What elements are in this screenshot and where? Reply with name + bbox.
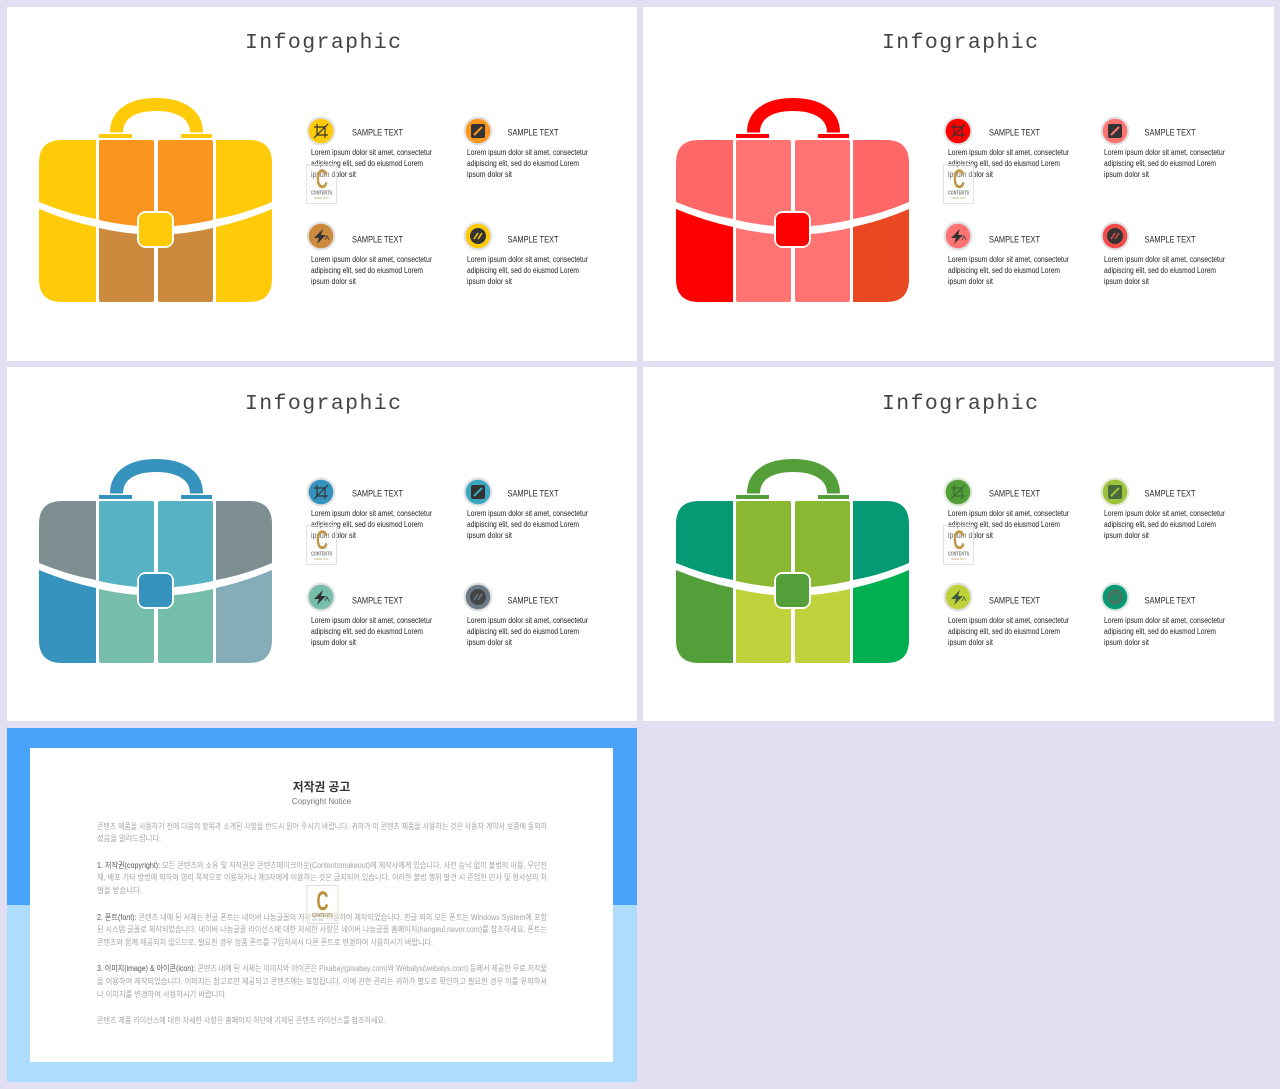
item 1: ipsum dolor sit (311, 170, 357, 179)
notice body text: 셨음을 알려드립니다. (97, 833, 161, 843)
watermark: CONTENTS (312, 913, 334, 919)
item 4: adipiscing elit, sed do eiusmod Lorem (467, 266, 579, 275)
item 3: SAMPLE TEXT (989, 234, 1040, 246)
item 3: ipsum dolor sit (311, 277, 357, 286)
item 4: SAMPLE TEXT (1144, 234, 1196, 246)
title: Infographic (245, 392, 401, 416)
item 1: ipsum dolor sit (948, 531, 994, 540)
watermark (306, 525, 336, 564)
item 2: ipsum dolor sit (467, 170, 513, 179)
item 1: adipiscing elit, sed do eiusmod Lorem (948, 520, 1060, 529)
notice body text: 재, 배포 기타 방법에 의하여 영리 목적으로 이용하거나 제3자에게 이용하는 것은 금지되어 있습니다. 이러한 불법 행위 발견 시 준엄한 민사 및 형사상의 처 (97, 872, 547, 882)
item 2: ipsum dolor sit (1104, 531, 1150, 540)
item 4: ipsum dolor sit (1104, 638, 1150, 647)
item 4: SAMPLE TEXT (1144, 596, 1196, 606)
panel: blue briefcase (7, 367, 637, 721)
item 1: adipiscing elit, sed do eiusmod Lorem (311, 520, 423, 529)
item 1: Lorem ipsum dolor sit amet, consectetur (311, 509, 432, 518)
item 3 (944, 582, 1069, 647)
item 2 (464, 478, 588, 540)
watermark: C (316, 886, 328, 916)
item 2: adipiscing elit, sed do eiusmod Lorem (1104, 159, 1216, 168)
item 3: SAMPLE TEXT (352, 234, 403, 246)
item 3: SAMPLE TEXT (989, 596, 1040, 606)
watermark: C (316, 525, 328, 555)
item 2: SAMPLE TEXT (508, 128, 559, 138)
item 3: adipiscing elit, sed do eiusmod Lorem (311, 627, 423, 636)
notice subheading: Copyright Notice (292, 797, 352, 806)
item 1 (944, 478, 1069, 540)
panel: red briefcase (643, 7, 1274, 361)
title: Infographic (882, 31, 1038, 55)
watermark: C (953, 164, 965, 194)
item 1: adipiscing elit, sed do eiusmod Lorem (311, 159, 423, 168)
item 2: Lorem ipsum dolor sit amet, consectetur (1104, 509, 1225, 518)
item 3 (944, 222, 1069, 286)
item 2 (1100, 478, 1225, 540)
notice body text: 된 시스템 글꼴로 제작되었습니다. 네이버 나눔글꼴 라이선스에 대한 자세한 사항은 네이버 나눔글꼴 홈페이지(hangeul.naver.com)를 참조하세요. 폰트는 (97, 924, 547, 934)
notice body text (97, 821, 548, 1025)
notice body text: 콘텐츠와 함께 제공되지 않으므로, 필요한 경우 정품 폰트를 구입하셔서 다른 폰트로 변경하여 사용하시기 바랍니다. (97, 937, 433, 947)
notice body text: 콘텐츠 제품 라이선스에 대한 자세한 사항은 홈페이지 하단에 기재된 콘텐츠 라이선스를 참조하세요. (97, 1015, 386, 1025)
watermark (306, 164, 336, 204)
item 4: ipsum dolor sit (467, 638, 513, 647)
item 4: Lorem ipsum dolor sit amet, consectetur (1104, 616, 1225, 625)
title: Infographic (882, 392, 1038, 416)
watermark: CONTENTS (948, 190, 970, 196)
item 3: adipiscing elit, sed do eiusmod Lorem (311, 266, 423, 275)
watermark (944, 164, 974, 204)
item 3 (306, 222, 432, 286)
watermark (944, 525, 974, 564)
item 1: Lorem ipsum dolor sit amet, consectetur (311, 148, 432, 157)
item 1 (306, 478, 432, 540)
item 1: SAMPLE TEXT (989, 488, 1040, 500)
item 3: adipiscing elit, sed do eiusmod Lorem (948, 266, 1060, 275)
watermark (307, 886, 338, 924)
item 2: ipsum dolor sit (467, 531, 513, 540)
item 4 (464, 582, 588, 647)
item 1: Lorem ipsum dolor sit amet, consectetur (948, 148, 1069, 157)
briefcase illustration (39, 104, 272, 302)
item 1 (944, 116, 1069, 179)
item 2: adipiscing elit, sed do eiusmod Lorem (1104, 520, 1216, 529)
item 2 (464, 116, 588, 179)
title: Infographic (245, 31, 401, 55)
item 3: Lorem ipsum dolor sit amet, consectetur (311, 616, 432, 625)
item 4: adipiscing elit, sed do eiusmod Lorem (1104, 627, 1216, 636)
item 2: Lorem ipsum dolor sit amet, consectetur (1104, 148, 1225, 157)
item 3: adipiscing elit, sed do eiusmod Lorem (948, 627, 1060, 636)
item 1: adipiscing elit, sed do eiusmod Lorem (948, 159, 1060, 168)
item 3: Lorem ipsum dolor sit amet, consectetur (948, 255, 1069, 264)
notice heading: 저작권 공고 (293, 780, 350, 794)
notice body text: 벌을 받습니다. (97, 885, 142, 895)
item 3: ipsum dolor sit (311, 638, 357, 647)
item 4: ipsum dolor sit (467, 277, 513, 286)
briefcase illustration (39, 466, 272, 663)
watermark: CONTENTS (948, 552, 970, 558)
item 2: ipsum dolor sit (1104, 170, 1150, 179)
briefcase illustration (676, 466, 909, 663)
panel: yellow briefcase (7, 7, 637, 361)
item 1: SAMPLE TEXT (352, 128, 403, 138)
item 4 (464, 222, 588, 286)
item 2: adipiscing elit, sed do eiusmod Lorem (467, 520, 579, 529)
item 3: SAMPLE TEXT (352, 596, 403, 606)
watermark: CONTENTS (311, 190, 333, 196)
briefcase illustration (676, 104, 909, 302)
watermark: C (953, 525, 965, 555)
item 1: SAMPLE TEXT (352, 488, 403, 500)
item 2: SAMPLE TEXT (508, 488, 559, 500)
notice body text: 3. 이미지(image) & 아이콘(icon): 콘텐츠 내에 된 서체는 이미지와 아이콘은 Pixabay(pixabay.com)와 Webalys(webalys.com) 등에서 제공한 무료 저작물 (97, 963, 547, 973)
watermark: MAKE OUT (314, 196, 329, 200)
watermark: MAKE OUT (314, 557, 329, 561)
item 4: Lorem ipsum dolor sit amet, consectetur (1104, 255, 1225, 264)
notice body text: 콘텐츠 제품을 사용하기 전에 다음의 항목과 소개된 사항을 반드시 읽어 주시기 바랍니다. 귀하가 이 콘텐츠 제품을 사용하는 것은 사용자 계약서 보증에 동의하 (97, 821, 548, 831)
item 3: ipsum dolor sit (948, 277, 994, 286)
item 3 (306, 582, 432, 647)
item 2: Lorem ipsum dolor sit amet, consectetur (467, 148, 588, 157)
panel: green briefcase (643, 367, 1274, 721)
watermark: C (316, 164, 328, 194)
item 3: Lorem ipsum dolor sit amet, consectetur (948, 616, 1069, 625)
item 4 (1100, 222, 1225, 286)
item 3: Lorem ipsum dolor sit amet, consectetur (311, 255, 432, 264)
item 4: SAMPLE TEXT (508, 234, 559, 246)
panel: copyright notice (7, 728, 637, 1082)
item 2: adipiscing elit, sed do eiusmod Lorem (467, 159, 579, 168)
item 1: ipsum dolor sit (948, 170, 994, 179)
item 4: adipiscing elit, sed do eiusmod Lorem (467, 627, 579, 636)
notice body text: 2. 폰트(font): 콘텐츠 내에 된 서체는 한글 폰트는 네이버 나눔글꼴의 저작물을 사용하여 제작되었습니다. 한글 외의 모든 폰트는 Windows System에 포함 (97, 912, 548, 922)
item 4: Lorem ipsum dolor sit amet, consectetur (467, 255, 588, 264)
notice body text: 을 이용하여 제작되었습니다. 이미지는 참고로만 제공되고 콘텐츠에는 포함됩니다. 이에 관한 권리는 귀하가 별도로 확인하고 필요한 경우 이를 유의하셔 (97, 976, 547, 986)
item 2: Lorem ipsum dolor sit amet, consectetur (467, 509, 588, 518)
notice body text: 1. 저작권(copyright): 모든 콘텐츠의 소유 및 저작권은 콘텐츠메이크아웃(Contentsmakeout)에 제작사에게 있습니다. 사전 승낙 없이 불법적 이용, 무단전 (97, 860, 547, 870)
item 1: ipsum dolor sit (311, 531, 357, 540)
watermark: MAKE OUT (951, 557, 966, 561)
item 1 (306, 116, 432, 179)
item 4: SAMPLE TEXT (508, 596, 559, 606)
item 1: Lorem ipsum dolor sit amet, consectetur (948, 509, 1069, 518)
item 4: ipsum dolor sit (1104, 277, 1150, 286)
watermark: MAKE OUT (951, 196, 966, 200)
item 2: SAMPLE TEXT (1144, 128, 1196, 138)
notice body text: 나 이미지를 변경하여 사용하시기 바랍니다. (97, 989, 227, 999)
item 2: SAMPLE TEXT (1144, 488, 1196, 500)
item 4 (1100, 582, 1225, 647)
item 1: SAMPLE TEXT (989, 128, 1040, 138)
item 4: adipiscing elit, sed do eiusmod Lorem (1104, 266, 1216, 275)
item 3: ipsum dolor sit (948, 638, 994, 647)
item 4: Lorem ipsum dolor sit amet, consectetur (467, 616, 588, 625)
watermark: CONTENTS (311, 552, 333, 558)
item 2 (1100, 116, 1225, 179)
